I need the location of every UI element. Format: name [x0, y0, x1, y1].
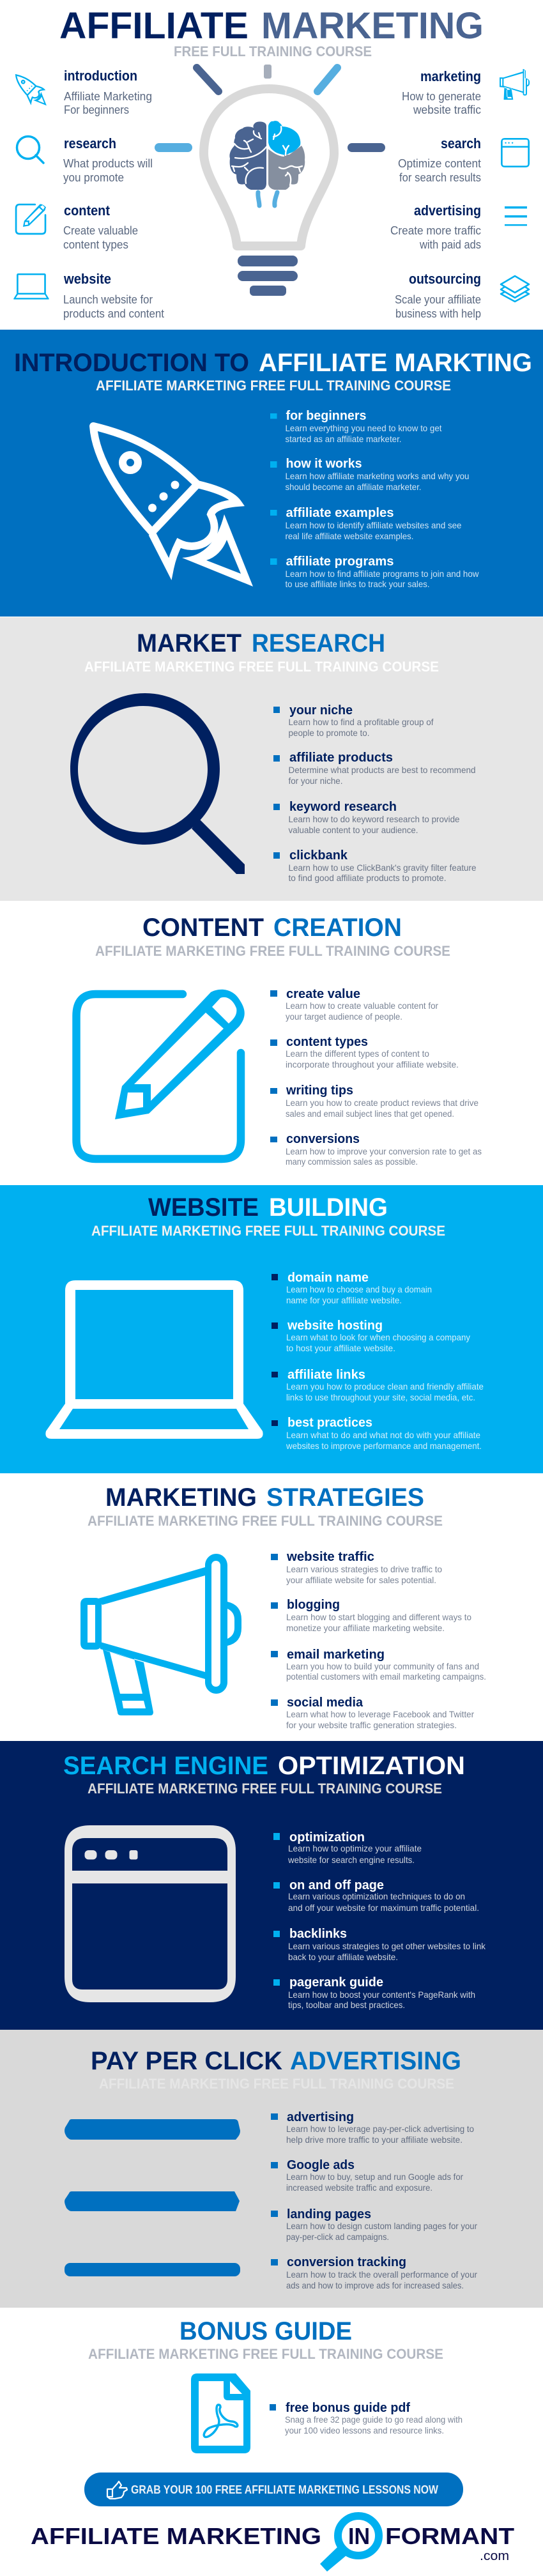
- item: content types: [270, 1035, 459, 1070]
- item: conversions: Learn how to improve your conversion rate to get as: [286, 1146, 482, 1156]
- item: optimization: website for search engine results.: [287, 1855, 415, 1865]
- item: advertising: [271, 2110, 474, 2145]
- item: free bonus guide pdf: [270, 2401, 463, 2435]
- heading: MARKETING: [105, 1483, 257, 1512]
- item: advertising: help drive more traffic to your affiliate website.: [286, 2135, 463, 2145]
- item: your niche: your niche: [289, 703, 353, 717]
- heading: CONTENT: [142, 914, 264, 942]
- item: content types: content types: [286, 1035, 368, 1049]
- text: outsourcing: business with help: [395, 307, 481, 320]
- item: create value: create value: [286, 987, 360, 1001]
- text: introduction: [64, 68, 152, 116]
- item: backlinks: back to your affiliate website.: [288, 1952, 398, 1962]
- item: create value: Learn how to create valuable content for: [286, 1000, 438, 1011]
- item: website hosting: to host your affiliate website.: [286, 1343, 395, 1353]
- item: affiliate products: [273, 751, 475, 786]
- item: Google ads: increased website traffic and exposure.: [286, 2182, 432, 2193]
- icon: logo magnifier: [320, 2516, 379, 2572]
- item: keyword research: Learn how to do keyword research to provide: [289, 814, 460, 824]
- item: for beginners: Learn everything you need to know to get: [285, 423, 442, 433]
- item: free bonus guide pdf: your 100 video lessons and resource links.: [285, 2425, 444, 2435]
- item: Google ads: Google ads: [287, 2158, 355, 2172]
- item: Google ads: [271, 2158, 463, 2193]
- subheading: AFFILIATE MARKETING FREE FULL TRAINING COURSE: [99, 2076, 454, 2092]
- item: pagerank guide: Learn how to boost your content's PageRank with: [288, 1989, 475, 2000]
- subheading: AFFILIATE MARKETING FREE FULL TRAINING COURSE: [88, 1513, 443, 1529]
- item: blogging: blogging: [287, 1598, 340, 1612]
- item: affiliate programs: [270, 555, 479, 589]
- heading: [105, 1483, 424, 1512]
- item: on and off page: [273, 1878, 479, 1913]
- item: optimization: Learn how to optimize your affiliate: [288, 1843, 422, 1853]
- icon: pencil and pad: [77, 990, 245, 1159]
- icon: megaphone: [80, 1554, 241, 1715]
- heading: CREATION: [273, 914, 402, 942]
- item: for beginners: for beginners: [286, 409, 367, 423]
- heading: BONUS GUIDE: [180, 2317, 352, 2345]
- icon: light bulb with brain: [155, 65, 385, 296]
- text: content: Create valuable: [63, 224, 138, 237]
- heading: WEBSITE: [148, 1193, 259, 1222]
- icon: small rocket: [16, 75, 47, 105]
- icon: small browser window: [501, 138, 530, 167]
- item: content types: incorporate throughout your affiliate website.: [286, 1059, 459, 1070]
- item: email marketing: [271, 1648, 486, 1682]
- icon: small megaphone: [500, 69, 530, 100]
- icon: laptop: [45, 1280, 263, 1439]
- text: search: for search results: [399, 171, 481, 184]
- text: marketing: How to generate: [402, 90, 481, 103]
- item: website traffic: [271, 1550, 442, 1585]
- item: backlinks: Learn various strategies to get other websites to link: [288, 1941, 486, 1951]
- icon: browser window: [65, 1825, 236, 2002]
- subtitle: FREE FULL TRAINING COURSE: [174, 43, 372, 59]
- icon: advert bars: [65, 2119, 240, 2276]
- heading: [142, 914, 402, 942]
- item: social media: social media: [287, 1696, 363, 1710]
- item: conversions: many commission sales as possible.: [286, 1156, 418, 1167]
- item: create value: [270, 987, 438, 1022]
- logo: affiliate marketing informant: .com: [480, 2549, 509, 2563]
- item: how it works: [270, 457, 469, 492]
- item: clickbank: Learn how to use ClickBank's gravity filter feature: [289, 862, 477, 873]
- title: [59, 5, 484, 47]
- text: content: [63, 203, 138, 251]
- heading: BUILDING: [269, 1193, 388, 1222]
- item: affiliate links: links to use throughout your site, social media, etc.: [286, 1392, 475, 1402]
- heading: SEARCH ENGINE: [63, 1752, 268, 1780]
- item: email marketing: email marketing: [287, 1648, 385, 1662]
- text: advertising: with paid ads: [419, 238, 481, 251]
- item: pagerank guide: pagerank guide: [289, 1975, 383, 1989]
- item: clickbank: clickbank: [289, 848, 348, 862]
- icon: magnifier: [70, 693, 245, 874]
- item: backlinks: backlinks: [289, 1927, 347, 1941]
- item: landing pages: landing pages: [287, 2207, 371, 2221]
- item: conversion tracking: [271, 2255, 477, 2290]
- heading: INTRODUCTION TO: [14, 349, 249, 377]
- title: AFFILIATE: [59, 5, 249, 47]
- panel: market research section: [0, 617, 543, 901]
- heading: ADVERTISING: [290, 2047, 461, 2075]
- text: search: Optimize content: [398, 157, 481, 170]
- text: website: [63, 271, 164, 320]
- item: blogging: monetize your affiliate marketing website.: [286, 1623, 445, 1633]
- item: website traffic: Learn various strategies to drive traffic to: [286, 1564, 442, 1574]
- item: affiliate links: affiliate links: [287, 1368, 365, 1382]
- text: search: search: [441, 135, 481, 151]
- icon: rocket: [93, 426, 253, 586]
- item: writing tips: sales and email subject lines that get opened.: [286, 1108, 454, 1119]
- heading: [63, 1752, 465, 1780]
- text: search: [398, 135, 481, 184]
- text: content: content: [64, 203, 111, 218]
- item: website traffic: your affiliate website for sales potential.: [286, 1575, 436, 1585]
- text: research: you promote: [63, 171, 124, 184]
- subheading: AFFILIATE MARKETING FREE FULL TRAINING COURSE: [96, 378, 451, 394]
- item: domain name: Learn how to choose and buy a domain: [286, 1284, 432, 1294]
- text: outsourcing: outsourcing: [409, 271, 481, 287]
- text: introduction: introduction: [64, 68, 137, 84]
- heading: [91, 2047, 461, 2075]
- heading: PAY PER CLICK: [91, 2047, 282, 2075]
- text: marketing: website traffic: [413, 103, 481, 116]
- item: domain name: [272, 1271, 432, 1305]
- item: best practices: [272, 1416, 482, 1451]
- icon: pdf document: [191, 2373, 250, 2453]
- item: affiliate programs: to use affiliate links to track your sales.: [285, 579, 429, 589]
- item: social media: [271, 1696, 474, 1730]
- item: blogging: Learn how to start blogging and different ways to: [286, 1612, 471, 1622]
- text: research: What products will: [63, 157, 153, 170]
- item: social media: Learn what how to leverage Facebook and Twitter: [286, 1709, 474, 1719]
- item: keyword research: keyword research: [289, 800, 397, 814]
- heading: AFFILIATE MARKTING: [259, 349, 532, 377]
- item: free bonus guide pdf: Snag a free 32 page guide to go read along with: [285, 2414, 463, 2425]
- item: website traffic: website traffic: [286, 1550, 374, 1564]
- heading: OPTIMIZATION: [278, 1752, 465, 1780]
- item: keyword research: [273, 800, 460, 835]
- item: how it works: how it works: [286, 457, 362, 471]
- item: how it works: Learn how affiliate marketing works and why you: [285, 471, 469, 481]
- item: writing tips: [270, 1084, 478, 1119]
- item: clickbank: [273, 848, 477, 883]
- item: landing pages: [271, 2207, 477, 2242]
- text: research: [63, 135, 153, 184]
- icon: three lines: [505, 206, 527, 226]
- heading: [14, 349, 532, 377]
- item: pagerank guide: [273, 1975, 475, 2010]
- text: advertising: advertising: [414, 203, 481, 218]
- panel: header hero: [13, 5, 530, 320]
- item: advertising: advertising: [287, 2110, 354, 2124]
- item: optimization: optimization: [289, 1830, 365, 1844]
- item: website hosting: Learn what to look for when choosing a company: [286, 1332, 470, 1342]
- item: social media: for your website traffic generation strategies.: [286, 1720, 457, 1730]
- subheading: AFFILIATE MARKETING FREE FULL TRAINING COURSE: [95, 943, 450, 959]
- subheading: AFFILIATE MARKETING FREE FULL TRAINING COURSE: [84, 659, 439, 675]
- item: affiliate products: affiliate products: [289, 751, 393, 765]
- panel: content creation section: [77, 914, 482, 1167]
- item: affiliate examples: Learn how to identify affiliate websites and see: [285, 520, 462, 530]
- item: for beginners: [270, 409, 442, 444]
- icon: small pencil pad: [16, 204, 46, 234]
- text: introduction: For beginners: [64, 103, 129, 116]
- text: content: content types: [63, 238, 128, 251]
- item: on and off page: on and off page: [289, 1878, 384, 1892]
- item: free bonus guide pdf: free bonus guide pdf: [286, 2401, 410, 2415]
- item: create value: your target audience of people.: [286, 1011, 402, 1022]
- heading: RESEARCH: [252, 629, 385, 657]
- text: marketing: [402, 68, 481, 116]
- item: for beginners: started as an affiliate marketer.: [285, 434, 401, 444]
- item: your niche: people to promote to.: [289, 728, 369, 738]
- item: pagerank guide: tips, toolbar and best practices.: [288, 2000, 405, 2010]
- item: conversions: conversions: [286, 1132, 360, 1146]
- item: writing tips: Learn you how to create product reviews that drive: [286, 1098, 478, 1108]
- item: affiliate products: Determine what products are best to recommend: [289, 765, 475, 775]
- text: introduction: Affiliate Marketing: [64, 90, 152, 103]
- item: website hosting: website hosting: [287, 1319, 383, 1333]
- panel: pay per click advertising section: [0, 2030, 543, 2308]
- text: research: research: [64, 135, 116, 151]
- item: affiliate examples: real life affiliate website examples.: [285, 531, 414, 541]
- item: advertising: Learn how to leverage pay-per-click advertising to: [286, 2124, 474, 2134]
- logo: affiliate marketing informant: [31, 2516, 514, 2572]
- panel: introduction section: [0, 330, 543, 617]
- item: website hosting: [272, 1319, 470, 1353]
- item: domain name: domain name: [287, 1271, 369, 1285]
- item: keyword research: valuable content to your audience.: [289, 825, 418, 835]
- panel: bonus guide section: [31, 2317, 514, 2572]
- button: call to action: [84, 2472, 463, 2506]
- item: your niche: [273, 703, 434, 738]
- panel: website building section: [0, 1185, 543, 1473]
- item: backlinks: [273, 1927, 486, 1962]
- item: best practices: best practices: [287, 1416, 372, 1430]
- text: website: Launch website for: [63, 293, 153, 306]
- heading: [148, 1193, 388, 1222]
- subheading: AFFILIATE MARKETING FREE FULL TRAINING COURSE: [88, 2346, 443, 2362]
- heading: MARKET: [137, 629, 241, 657]
- item: affiliate examples: affiliate examples: [286, 506, 394, 520]
- item: optimization: [273, 1830, 422, 1865]
- text: marketing: marketing: [420, 68, 481, 84]
- item: affiliate programs: Learn how to find affiliate programs to join and how: [285, 569, 479, 579]
- item: email marketing: Learn you how to build your community of fans and: [286, 1661, 479, 1671]
- item: affiliate links: [272, 1368, 484, 1402]
- item: on and off page: Learn various optimization techniques to do on: [288, 1891, 465, 1901]
- item: blogging: [271, 1598, 471, 1633]
- text: outsourcing: [395, 271, 481, 320]
- item: Google ads: Learn how to buy, setup and run Google ads for: [286, 2172, 463, 2182]
- subheading: AFFILIATE MARKETING FREE FULL TRAINING COURSE: [88, 1781, 442, 1797]
- icon: thumbs up: [107, 2481, 127, 2499]
- item: conversion tracking: Learn how to track the overall performance of your: [286, 2269, 477, 2280]
- icon: small magnifier: [17, 137, 43, 163]
- text: advertising: Create more traffic: [390, 224, 481, 237]
- item: conversion tracking: ads and how to improve ads for increased sales.: [286, 2280, 464, 2290]
- item: conversions: [270, 1132, 482, 1167]
- heading: [137, 629, 385, 657]
- logo: affiliate marketing informant: IN: [348, 2523, 370, 2549]
- item: landing pages: Learn how to design custom landing pages for your: [286, 2221, 477, 2231]
- item: domain name: name for your affiliate website.: [286, 1295, 402, 1305]
- item: on and off page: and off your website for maximum traffic potential.: [288, 1903, 479, 1913]
- text: outsourcing: Scale your affiliate: [395, 293, 481, 306]
- icon: small laptop: [13, 273, 49, 300]
- logo: affiliate marketing informant: AFFILIATE MARKETING: [31, 2523, 321, 2549]
- title: MARKETING: [261, 5, 484, 47]
- item: affiliate examples: [270, 506, 462, 541]
- item: email marketing: potential customers with email marketing campaigns.: [286, 1671, 486, 1682]
- panel: marketing strategies section: [80, 1483, 486, 1730]
- item: clickbank: to find good affiliate products to promote.: [289, 873, 446, 883]
- text: website: products and content: [63, 307, 164, 320]
- item: best practices: websites to improve performance and management.: [286, 1441, 482, 1451]
- item: affiliate products: for your niche.: [289, 776, 342, 786]
- item: writing tips: writing tips: [286, 1084, 353, 1098]
- panel: search engine optimization section: [0, 1741, 543, 2030]
- logo: affiliate marketing informant: FORMANT: [385, 2523, 514, 2549]
- item: content types: Learn the different types of content to: [286, 1048, 429, 1059]
- item: affiliate links: Learn you how to produce clean and friendly affiliate: [286, 1381, 484, 1392]
- item: conversion tracking: conversion tracking: [287, 2255, 406, 2269]
- icon: layers: [501, 276, 529, 302]
- item: best practices: Learn what to do and what not do with your affiliate: [286, 1430, 480, 1440]
- heading: STRATEGIES: [266, 1483, 424, 1512]
- item: landing pages: pay-per-click ad campaigns.: [286, 2232, 389, 2242]
- text: advertising: [390, 203, 481, 251]
- item: how it works: should become an affiliate marketer.: [285, 482, 422, 492]
- item: affiliate programs: affiliate programs: [286, 555, 394, 569]
- button: call to action: GRAB YOUR 100 FREE AFFILIATE MARKETING LESSONS NOW: [131, 2483, 438, 2496]
- text: website: website: [63, 271, 111, 287]
- subheading: AFFILIATE MARKETING FREE FULL TRAINING COURSE: [91, 1223, 445, 1239]
- item: your niche: Learn how to find a profitable group of: [289, 717, 434, 727]
